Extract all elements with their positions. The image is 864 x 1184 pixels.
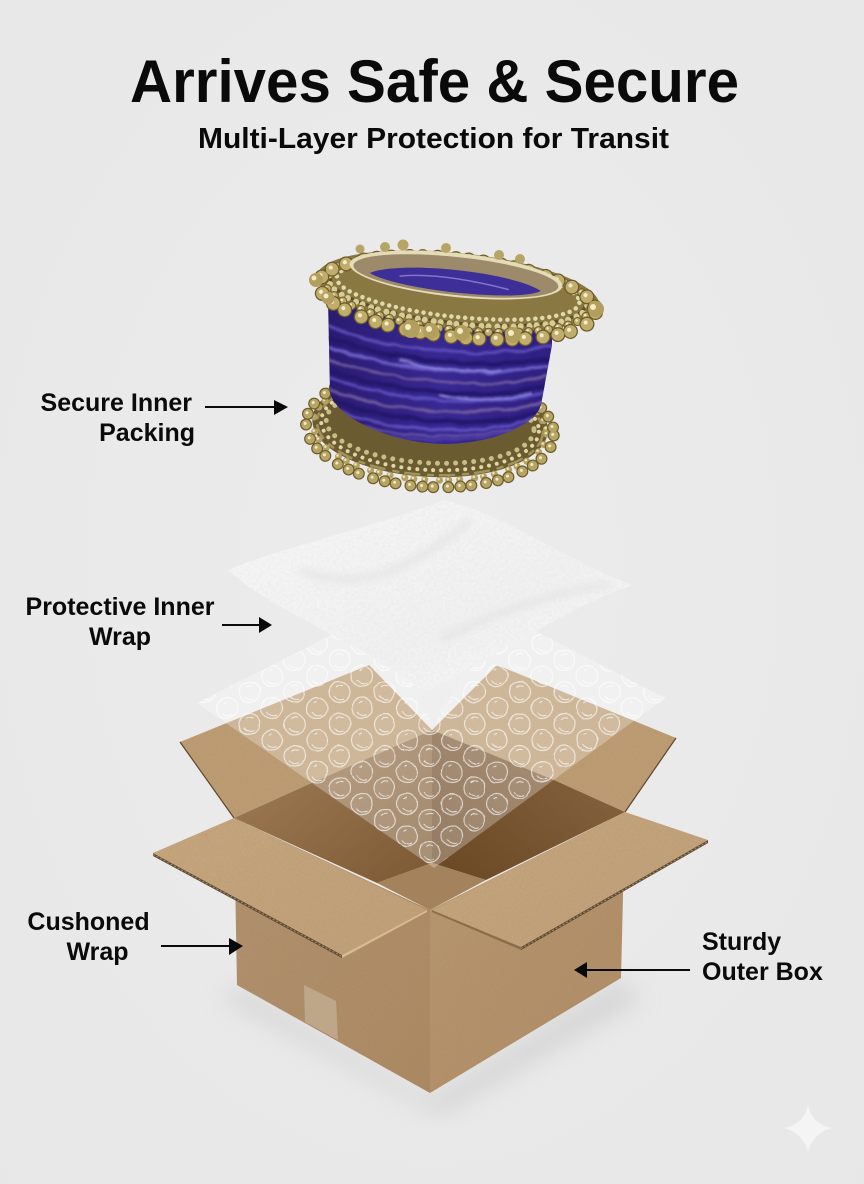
label: protective inner wrap: Wrap xyxy=(89,623,151,651)
label: secure inner packing xyxy=(41,389,195,447)
subtitle: Multi-Layer Protection for Transit xyxy=(198,123,669,155)
title: Arrives Safe & Secure xyxy=(130,48,739,115)
illustration: cardboard box xyxy=(153,665,708,1115)
tissue lower fold xyxy=(412,664,474,728)
illustration: white tissue wrap xyxy=(228,500,632,728)
label: sturdy outer box: Outer Box xyxy=(702,958,823,986)
illustration: bubble wrap sheet xyxy=(197,628,665,868)
label: sturdy outer box xyxy=(702,928,823,986)
purple glass bangle stack xyxy=(328,300,552,444)
box ground shadow xyxy=(225,978,640,1115)
label: secure inner packing: Secure Inner xyxy=(41,389,192,417)
label: secure inner packing: Packing xyxy=(99,419,195,447)
icon: sparkle watermark xyxy=(784,1104,832,1153)
label: cushoned wrap: Cushoned xyxy=(27,908,150,936)
label: protective inner wrap xyxy=(26,593,215,651)
right outer face xyxy=(430,812,625,1093)
tissue sheet xyxy=(228,500,632,692)
lower gold bead ring xyxy=(302,364,557,493)
left outer face xyxy=(234,818,430,1093)
right front flap xyxy=(432,812,708,950)
left front flap xyxy=(153,818,427,958)
label: protective inner wrap: Protective Inner xyxy=(26,593,215,621)
top and corner beads xyxy=(309,240,604,343)
bangle opening and metal rim xyxy=(347,242,565,308)
tape patch xyxy=(304,985,338,1040)
back flaps xyxy=(180,665,676,818)
box interior xyxy=(234,730,625,910)
upper gold bead ring xyxy=(309,238,604,351)
arrow: sturdy outer box xyxy=(574,962,690,978)
arrow: cushoned wrap xyxy=(161,938,243,955)
arrow: protective inner wrap xyxy=(222,617,272,633)
label: cushoned wrap: Wrap xyxy=(66,938,129,966)
label: sturdy outer box: Sturdy xyxy=(702,928,781,956)
arrow: secure inner packing xyxy=(205,400,288,415)
illustration: bangle set xyxy=(302,238,604,493)
tissue folds xyxy=(300,520,610,640)
back flap raw edges xyxy=(180,738,676,818)
label: cushoned wrap xyxy=(27,908,150,966)
